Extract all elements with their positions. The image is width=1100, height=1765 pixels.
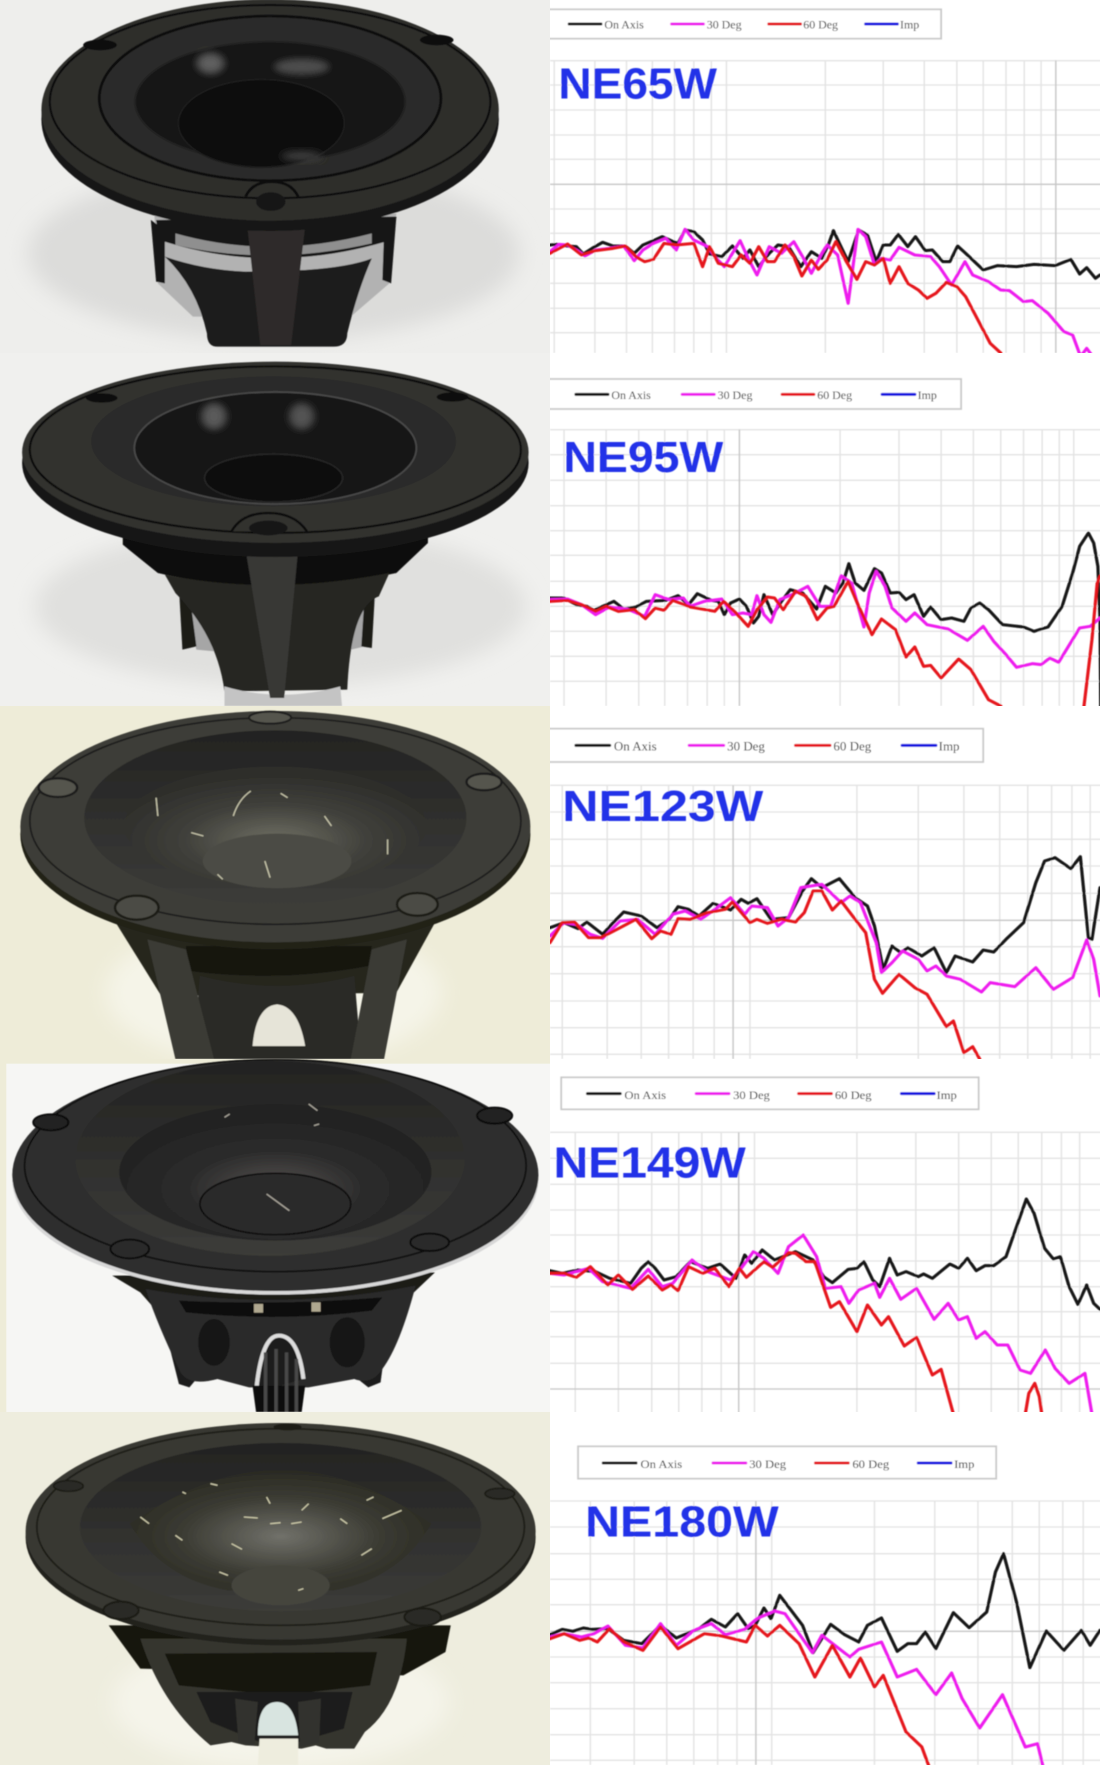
panel: NE123W response chart (546, 706, 1100, 1059)
legend: NE149W: Imp (937, 1088, 957, 1102)
legend: NE95W: Imp (918, 389, 937, 402)
title: NE65W: NE65W (558, 59, 717, 108)
legend: NE123W (546, 729, 983, 762)
panel: NE65W response chart (546, 0, 1100, 354)
legend: NE123W: 30 Deg (727, 740, 766, 753)
panel: NE180W response chart (550, 1412, 1100, 1765)
legend: NE180W: 30 Deg (749, 1457, 786, 1471)
panel: NE149W driver photo (0, 1059, 550, 1412)
curve: 60 degrees NE95W (550, 581, 1001, 706)
legend: NE65W: 30 Deg (707, 19, 742, 32)
legend: NE180W (578, 1446, 996, 1479)
legend: NE65W (546, 9, 941, 39)
legend: NE123W: Imp (939, 740, 960, 753)
curve: 30 degrees NE65W (550, 229, 1080, 354)
panel: NE95W driver photo (0, 353, 550, 706)
legend: NE149W (561, 1077, 979, 1109)
legend: NE180W: Imp (954, 1457, 974, 1471)
curve: 30 degrees NE149W (550, 1235, 1092, 1414)
panel: NE180W driver photo (0, 1412, 550, 1765)
legend: NE149W: 30 Deg (733, 1088, 770, 1102)
panel: NE95W response chart (546, 353, 1100, 707)
curve: on axis NE65W (550, 230, 1100, 280)
legend: NE65W: 60 Deg (803, 19, 838, 32)
title: NE95W: NE95W (563, 432, 724, 482)
curve: 30 degrees NE180W (550, 1611, 1043, 1765)
curve: 60 degrees NE123W (550, 891, 980, 1059)
curve: on axis NE149W (550, 1199, 1100, 1309)
legend: NE95W: On Axis (611, 389, 651, 402)
curve: on axis NE123W (550, 857, 1100, 973)
legend: NE95W: 30 Deg (718, 389, 753, 402)
panel: NE65W driver photo (0, 0, 550, 353)
title: NE123W: NE123W (562, 781, 764, 831)
legend: NE65W: On Axis (604, 19, 644, 32)
legend: NE95W (546, 379, 961, 409)
legend: NE180W: 60 Deg (852, 1457, 889, 1471)
title: NE180W: NE180W (585, 1496, 779, 1546)
curve: 60 degrees NE180W (550, 1625, 929, 1765)
curve: on axis NE180W (550, 1554, 1100, 1668)
title: NE149W: NE149W (554, 1137, 746, 1187)
curve: 60 degrees NE149W (550, 1253, 953, 1414)
legend: NE180W: On Axis (640, 1457, 682, 1471)
curve: 30 degrees NE123W (550, 884, 1100, 996)
legend: NE65W: Imp (900, 19, 919, 32)
legend: NE149W: 60 Deg (835, 1088, 872, 1102)
legend: NE149W: On Axis (624, 1088, 666, 1102)
legend: NE95W: 60 Deg (817, 389, 852, 402)
legend: NE123W: 60 Deg (833, 740, 872, 753)
legend: NE123W: On Axis (614, 740, 657, 753)
panel: NE149W response chart (550, 1060, 1100, 1414)
curve: 30 degrees NE95W (550, 571, 1100, 667)
curve: 60 degrees NE65W (550, 242, 1001, 353)
curve: on axis NE95W (550, 533, 1100, 707)
panel: NE123W driver photo (0, 706, 550, 1066)
